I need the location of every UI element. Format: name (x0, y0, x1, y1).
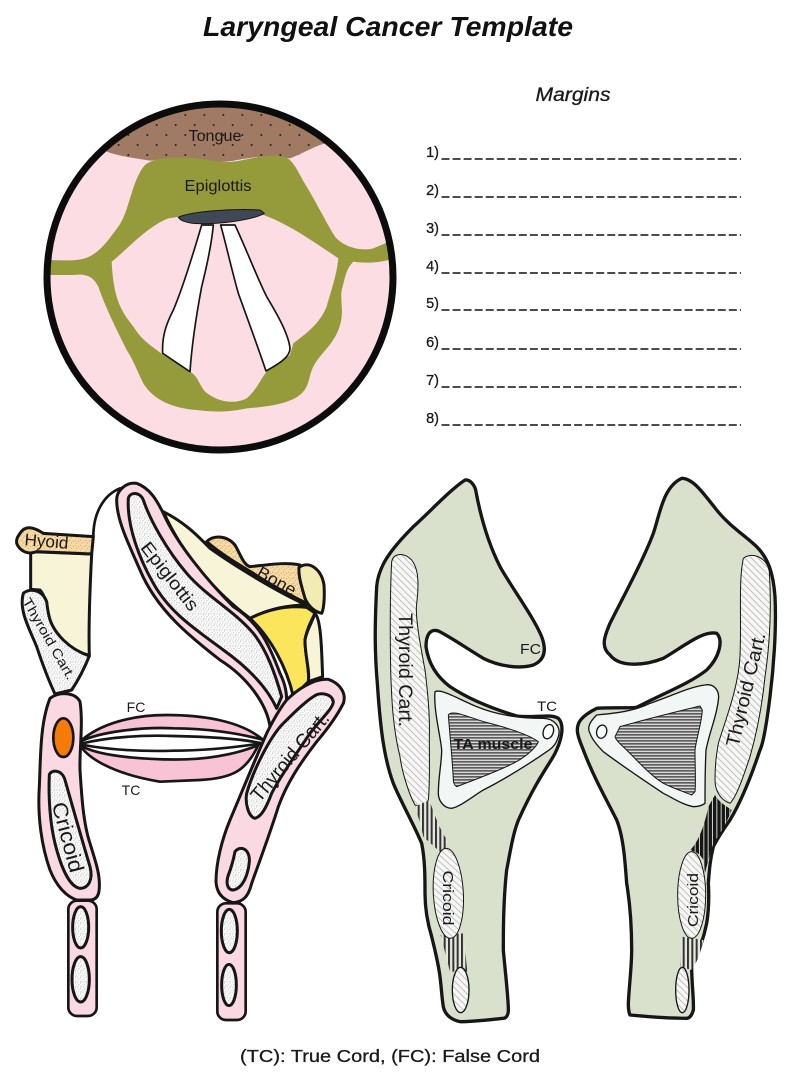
label: FC coronal: FC (520, 641, 541, 658)
margin line 3: 3) (426, 221, 439, 237)
margin line 8: 8) (426, 411, 439, 427)
right TA compartment (589, 685, 719, 807)
label: TA muscle: TA muscle (454, 737, 532, 753)
margin line 5: 5) (426, 296, 439, 312)
left TA muscle (448, 713, 538, 787)
cricoid pink (39, 694, 99, 900)
left tracheal ring (68, 901, 97, 1016)
epiglottis cartilage (128, 494, 282, 708)
label: epiglottis sagittal: Epiglottis (137, 538, 203, 615)
right stripes lower (680, 937, 703, 970)
ventricle lines (79, 736, 262, 751)
margin line 1: 1) (426, 145, 439, 161)
label: thyroid cart upper: Thyroid Cart. (19, 595, 78, 682)
right tissue outline (577, 478, 775, 1018)
thyrohyoid membrane (31, 552, 92, 655)
epiglottis and folds (43, 156, 393, 412)
circle outline (47, 104, 393, 450)
right cricoid (678, 852, 706, 938)
label: tongue: Tongue (188, 128, 242, 145)
heading: margins: Margins (536, 85, 611, 106)
panel: laryngoscopic view (43, 97, 393, 450)
true cord band (80, 745, 258, 782)
right small cartilage (676, 967, 689, 1013)
right stripes upper (690, 795, 732, 873)
panel: margins list (426, 85, 741, 427)
left stripes lower (441, 933, 467, 972)
right TC oval (595, 724, 608, 739)
bone end (299, 565, 324, 613)
hyoid bone left (17, 528, 93, 554)
label: thyroid cart right: Thyroid Cart. (723, 630, 771, 749)
margin line 7: 7) (426, 373, 439, 389)
left coronal shapes (375, 480, 562, 1022)
label: cricoid left: Cricoid (439, 870, 455, 926)
left vocal cord (163, 225, 213, 372)
left stripes upper (415, 800, 447, 857)
footer legend: (TC): True Cord, (FC): False Cord (240, 1046, 540, 1066)
label: TC coronal: TC (537, 698, 557, 714)
yellow fat space (250, 607, 315, 697)
label: thyroid cart left: Thyroid Cart. (394, 613, 415, 727)
pre-epiglottic cream region (163, 512, 307, 618)
cream tissue (305, 613, 323, 682)
thyroid cartilage anterior (246, 694, 333, 818)
right thyroid cartilage (715, 555, 770, 803)
label: thyroid cart anterior: Thyroid Cart. (247, 708, 334, 806)
sagittal anatomy shapes (17, 483, 344, 1020)
panel: coronal section left (375, 480, 562, 1022)
left TA compartment (435, 691, 559, 808)
tongue (106, 108, 324, 162)
thyroid cartilage upper (22, 590, 89, 694)
left thyroid cartilage (390, 555, 429, 806)
right TA muscle (615, 706, 702, 795)
margin line 4: 4) (426, 259, 439, 275)
title: Laryngeal Cancer Template (203, 11, 573, 42)
thyroid cartilage anterior pink (216, 679, 344, 903)
margin line 2: 2) (426, 183, 439, 199)
label: cricoid right: Cricoid (686, 873, 702, 927)
label: TC left: TC (122, 782, 140, 798)
panel: sagittal larynx diagram (17, 483, 344, 1020)
lower anterior cartilage (227, 848, 249, 890)
label: cricoid sagittal: Cricoid (47, 800, 88, 875)
label: epiglottis: Epiglottis (184, 178, 252, 195)
view background circle (47, 104, 393, 450)
arytenoid orange (53, 718, 73, 757)
panel: coronal section right (577, 478, 775, 1018)
label: bone: Bone (254, 563, 300, 600)
left cricoid (431, 848, 466, 939)
margin line 6: 6) (426, 335, 439, 351)
right vocal cord (221, 225, 290, 371)
label: hyoid: Hyoid (24, 530, 69, 553)
cricoid cartilage (49, 771, 91, 888)
hyoid bone right (207, 537, 307, 603)
airway curve (93, 488, 120, 537)
epiglottis pink (117, 483, 287, 727)
left tissue outline (375, 480, 562, 1022)
vocal cords and arytenoid (163, 210, 290, 372)
dark opening (178, 210, 264, 224)
right tracheal ring (217, 903, 246, 1020)
left small cartilage (452, 967, 469, 1013)
label: FC left: FC (127, 699, 145, 715)
right coronal shapes (577, 478, 775, 1018)
left TC oval (541, 723, 556, 740)
false cord band (80, 715, 263, 742)
